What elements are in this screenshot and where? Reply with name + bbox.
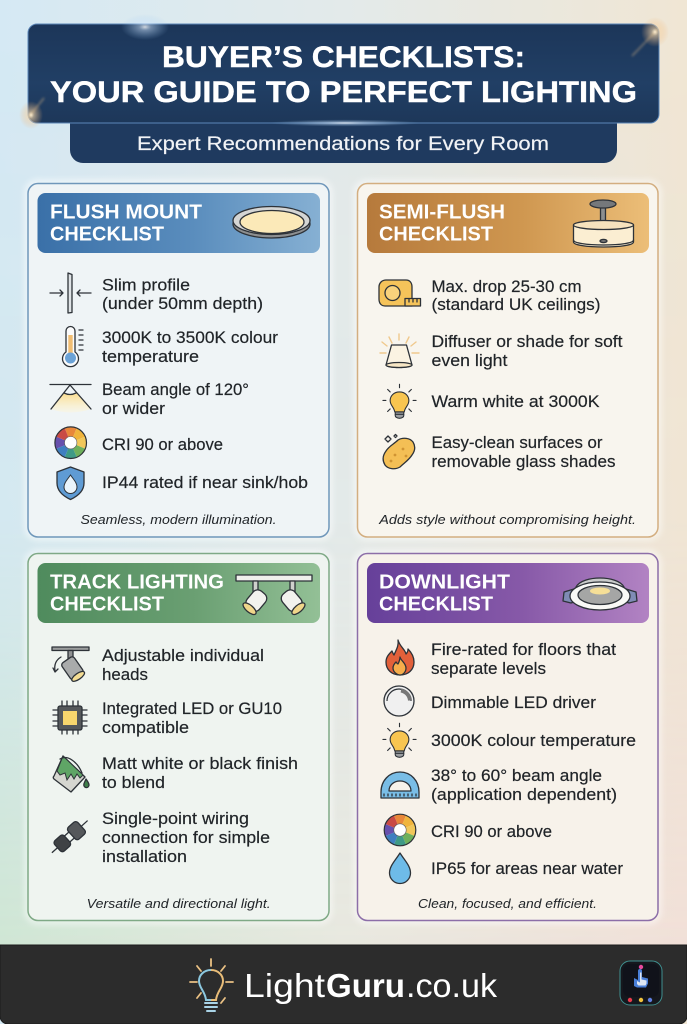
- icon: beam angle: [50, 384, 91, 412]
- item: diffuser: [380, 333, 623, 370]
- title panel: [28, 24, 659, 123]
- item: single-point wiring: connection for simple: [102, 829, 270, 847]
- item: integrated LED: compatible: [102, 719, 189, 737]
- header band: [38, 193, 320, 253]
- header band: FLUSH MOUNT: [50, 200, 202, 224]
- item: adjustable heads: [52, 647, 264, 684]
- header band: TRACK LIGHTING: [50, 570, 224, 594]
- light flares: [19, 14, 669, 129]
- item: integrated LED: [53, 700, 282, 737]
- header band: CHECKLIST: [379, 223, 493, 246]
- tagline: Clean, focused, and efficient.: [418, 896, 597, 911]
- item: slim profile: (under 50mm depth): [102, 295, 263, 313]
- header band: SEMI-FLUSH: [379, 200, 505, 224]
- panel: track lighting checklist: [24, 549, 333, 925]
- item: beam angle: (application dependent): [431, 786, 617, 804]
- icon: sponge: [383, 434, 415, 469]
- item: CRI: CRI 90 or above: [431, 823, 552, 841]
- icon: water drop: [390, 853, 410, 884]
- item: max drop: (standard UK ceilings): [432, 296, 600, 314]
- title panel: YOUR GUIDE TO PERFECT LIGHTING: [50, 76, 637, 109]
- item: single-point wiring: installation: [102, 848, 187, 866]
- item: matt finish: to blend: [102, 774, 165, 792]
- item: warm white: [383, 384, 600, 418]
- icon: colour wheel: [55, 427, 86, 459]
- icon: flame: [386, 640, 414, 675]
- icon: dimmer dial: [384, 686, 414, 716]
- icon: flush ceiling light: [233, 206, 310, 238]
- icon: semi-flush ceiling light: [574, 200, 634, 247]
- subtitle ribbon: [70, 118, 617, 163]
- item: diffuser: Diffuser or shade for soft: [432, 333, 623, 351]
- item: matt finish: Matt white or black finish: [102, 755, 298, 773]
- header band: [367, 193, 649, 253]
- panel: semi-flush checklist: [353, 179, 662, 541]
- card background: [353, 549, 662, 925]
- panel: flush mount checklist: [24, 179, 333, 541]
- item: fire-rated: [386, 640, 616, 678]
- item: integrated LED: Integrated LED or GU10: [102, 700, 282, 718]
- title banner: [19, 14, 669, 163]
- header band: DOWNLIGHT: [379, 570, 510, 594]
- item: colour temperature: temperature: [102, 348, 199, 366]
- tagline: Seamless, modern illumination.: [80, 512, 276, 527]
- icon: LightGuru bulb logo: [190, 959, 233, 1011]
- footer bar: [0, 945, 687, 1024]
- item: single-point wiring: Single-point wiring: [102, 810, 249, 828]
- header band: CHECKLIST: [50, 223, 164, 246]
- tagline: Versatile and directional light.: [87, 896, 271, 911]
- item: fire-rated: separate levels: [431, 660, 546, 678]
- subtitle ribbon: Expert Recommendations for Every Room: [137, 134, 549, 155]
- icon: water shield: [57, 467, 84, 500]
- item: fire-rated: Fire-rated for floors that: [431, 641, 616, 659]
- item: CRI: CRI 90 or above: [102, 436, 223, 454]
- item: max drop: Max. drop 25-30 cm: [432, 278, 582, 296]
- card background: [353, 179, 662, 541]
- item: slim profile: Slim profile: [102, 277, 190, 295]
- item: adjustable heads: heads: [102, 666, 148, 684]
- icon: light bulb: [383, 723, 416, 757]
- icon: protractor: [381, 772, 419, 798]
- item: max drop: [379, 278, 600, 314]
- header band: [367, 563, 649, 623]
- card background: [24, 549, 333, 925]
- item: diffuser: even light: [432, 352, 508, 370]
- panel: downlight checklist: [353, 549, 662, 925]
- icon: lamp shade: [380, 334, 419, 368]
- item: dimmable: Dimmable LED driver: [431, 694, 597, 712]
- icon: thermometer: [62, 327, 83, 367]
- item: easy clean: removable glass shades: [432, 453, 616, 471]
- item: warm white: Warm white at 3000K: [432, 393, 600, 411]
- item: slim profile: [50, 273, 263, 313]
- item: beam angle: Beam angle of 120°: [102, 381, 249, 399]
- item: beam angle: 38° to 60° beam angle: [431, 767, 602, 785]
- item: single-point wiring: [47, 810, 270, 866]
- item: adjustable heads: Adjustable individual: [102, 647, 264, 665]
- header band: CHECKLIST: [379, 593, 493, 616]
- tagline: Adds style without compromising height.: [378, 512, 636, 527]
- icon: recessed downlight: [563, 578, 637, 610]
- item: colour temperature: [62, 327, 279, 367]
- icon: light bulb: [383, 384, 416, 418]
- item: CRI: [384, 814, 552, 846]
- item: dimmable: [384, 686, 597, 716]
- logo wordmark: Guru: [326, 967, 405, 1004]
- item: easy clean: Easy-clean surfaces or: [432, 434, 603, 452]
- item: CRI: [55, 427, 223, 459]
- item: beam angle: [50, 381, 249, 418]
- icon: pointer badge: [620, 961, 662, 1005]
- icon: colour wheel: [384, 814, 416, 846]
- icon: track light: [236, 575, 312, 616]
- icon: tape measure: [379, 280, 420, 306]
- item: matt finish: [53, 755, 298, 792]
- logo wordmark: .co.uk: [406, 967, 498, 1004]
- item: IP65: IP65 for areas near water: [431, 860, 624, 878]
- title panel: BUYER’S CHECKLISTS:: [162, 41, 525, 74]
- item: 3000K: [383, 723, 636, 757]
- card background: [24, 179, 333, 541]
- item: beam angle: or wider: [102, 400, 166, 418]
- item: beam angle: [381, 767, 617, 804]
- icon: paint can: [53, 756, 89, 792]
- item: 3000K: 3000K colour temperature: [431, 732, 636, 750]
- icon: adjustable head: [52, 647, 89, 683]
- icon: plug connector: [47, 815, 93, 858]
- logo wordmark: Light: [244, 967, 325, 1004]
- header band: [38, 563, 320, 623]
- icon: slim profile: [50, 273, 91, 313]
- item: colour temperature: 3000K to 3500K colour: [102, 329, 279, 347]
- icon: LED chip: [53, 701, 87, 734]
- item: easy clean: [383, 434, 616, 471]
- item: IP65: [390, 853, 624, 884]
- item: IP44: IP44 rated if near sink/hob: [102, 474, 308, 492]
- header band: CHECKLIST: [50, 593, 164, 616]
- item: IP44: [57, 467, 308, 500]
